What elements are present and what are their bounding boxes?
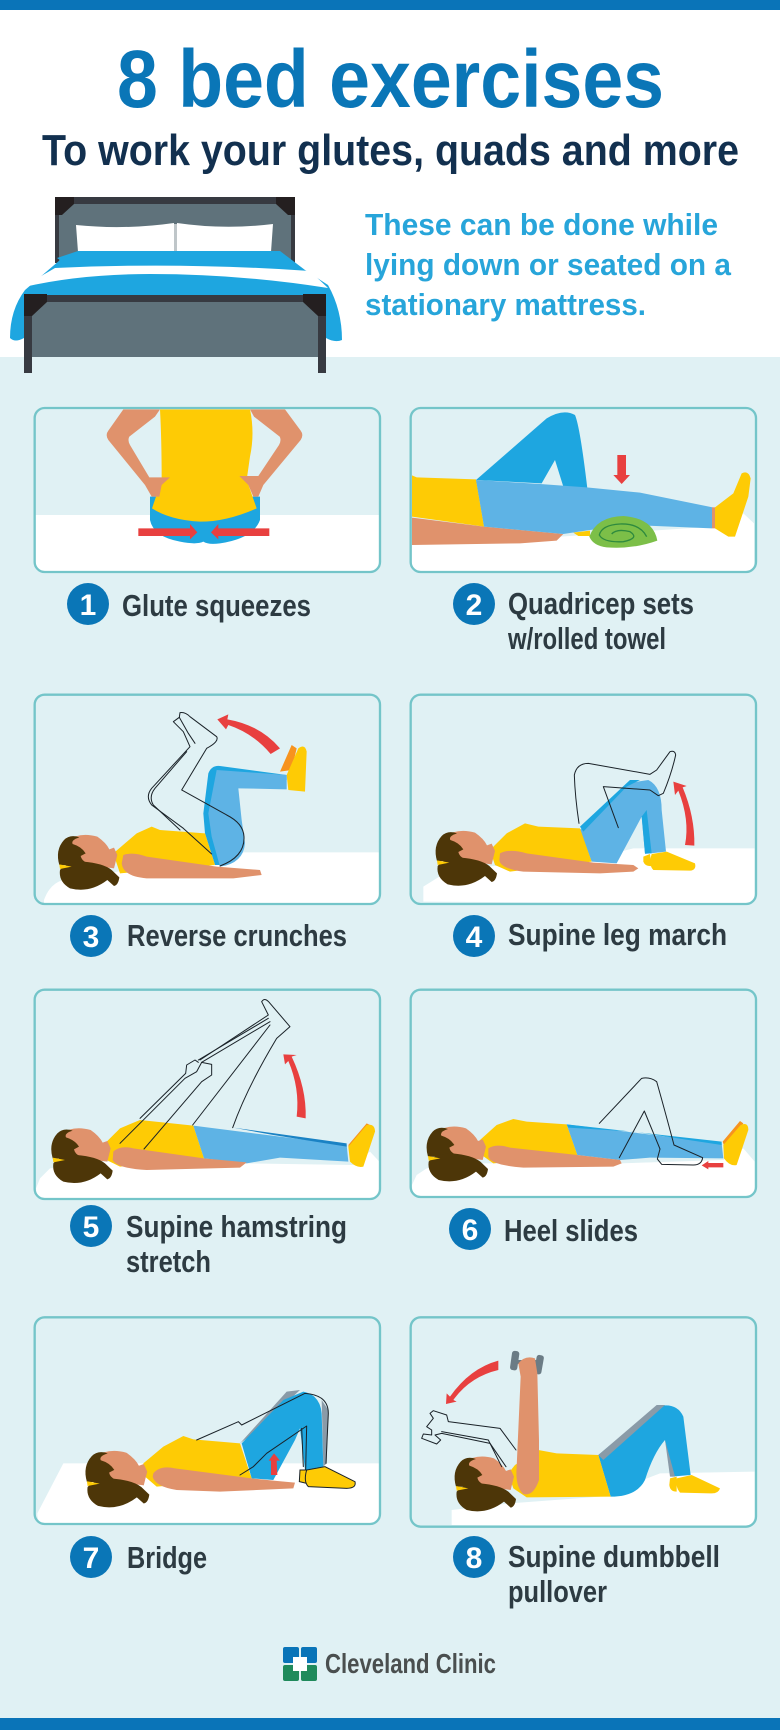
arm <box>153 1467 295 1492</box>
raised arm <box>516 1357 539 1494</box>
title: 8 bed exercises <box>117 34 664 125</box>
label 2: Quadricep sets <box>508 586 694 621</box>
feet <box>280 745 297 772</box>
card frame <box>411 1317 756 1527</box>
logo: Cleveland Clinic <box>283 1647 496 1681</box>
label 7 <box>70 1536 207 1578</box>
arrow <box>269 1453 280 1475</box>
label 8: 8 <box>466 1542 482 1575</box>
panel 3: reverse crunches <box>35 695 380 904</box>
intro text: stationary mattress. <box>365 287 646 322</box>
torso <box>152 409 257 522</box>
outline <box>574 751 676 828</box>
torso <box>508 1450 611 1497</box>
arm <box>113 1147 247 1170</box>
arm <box>412 518 563 545</box>
label 6: Heel slides <box>504 1213 638 1248</box>
arms <box>107 409 170 497</box>
card frame <box>411 408 756 572</box>
arrow <box>702 1161 723 1169</box>
shorts <box>412 475 484 527</box>
arm <box>499 851 638 873</box>
panel 1: glute squeezes <box>35 408 380 572</box>
leg <box>567 1124 723 1160</box>
label 6: 6 <box>462 1214 478 1247</box>
label 2 <box>453 583 694 656</box>
logo: Cleveland Clinic: Cleveland Clinic <box>325 1648 496 1679</box>
leg <box>203 766 287 865</box>
label 7: 7 <box>83 1542 99 1575</box>
outline <box>148 712 244 866</box>
label 8: pullover <box>508 1574 607 1609</box>
label 1 <box>67 583 311 625</box>
arm <box>488 1146 622 1168</box>
intro text <box>365 207 732 322</box>
card frame <box>35 1317 380 1524</box>
raised leg <box>476 412 587 488</box>
label 4: 4 <box>466 921 483 954</box>
arrow <box>673 782 694 846</box>
label 3: Reverse crunches <box>127 918 347 953</box>
icon: bed <box>10 197 342 373</box>
leg <box>580 780 666 863</box>
label 6 <box>449 1208 638 1250</box>
outline <box>599 1078 703 1165</box>
label 1: 1 <box>80 589 96 622</box>
head <box>51 1128 113 1183</box>
label 5 <box>70 1205 347 1279</box>
arrow <box>283 1054 306 1118</box>
torso <box>143 1436 252 1487</box>
arrows <box>138 524 197 539</box>
torso <box>480 1119 577 1163</box>
glutes <box>150 497 260 544</box>
leg <box>193 1126 348 1163</box>
label 2: 2 <box>466 589 482 622</box>
bottom bar <box>0 1718 780 1730</box>
head <box>58 835 119 890</box>
leg <box>598 1405 691 1497</box>
outline <box>120 1000 290 1149</box>
label 5: stretch <box>126 1244 211 1279</box>
arrow <box>446 1361 498 1404</box>
label 3 <box>70 915 347 957</box>
label 8: Supine dumbbell <box>508 1539 720 1574</box>
top bar <box>0 0 780 10</box>
panel 6: heel slides <box>411 990 756 1197</box>
panel 5: supine hamstring stretch <box>35 990 380 1199</box>
head <box>436 831 497 886</box>
intro text: lying down or seated on a <box>365 247 732 282</box>
intro text: These can be done while <box>365 207 718 242</box>
label 7: Bridge <box>127 1540 207 1575</box>
foot <box>669 1477 677 1492</box>
card frame <box>35 695 380 904</box>
foot <box>348 1123 370 1152</box>
head <box>85 1451 149 1507</box>
rolled towel <box>589 516 657 548</box>
label 5: 5 <box>83 1211 99 1244</box>
panel 4: supine leg march <box>411 695 756 904</box>
outline <box>422 1411 516 1467</box>
label 3: 3 <box>83 921 99 954</box>
torso <box>113 827 215 873</box>
label 1: Glute squeezes <box>122 588 311 623</box>
panel 7: bridge <box>35 1317 380 1524</box>
card frame <box>411 990 756 1197</box>
label 5: Supine hamstring <box>126 1209 347 1244</box>
panel 8: supine dumbbell pullover <box>411 1317 756 1527</box>
head <box>427 1127 488 1181</box>
straight leg <box>476 480 713 534</box>
arrow <box>613 455 630 484</box>
label 4: Supine leg march <box>508 917 727 952</box>
feet <box>643 854 652 866</box>
foot <box>723 1121 743 1148</box>
dumbbell <box>510 1351 544 1375</box>
arm <box>122 854 262 878</box>
outline <box>197 1393 328 1475</box>
card frame <box>35 408 380 572</box>
panel 2: quadricep sets <box>411 408 756 572</box>
label 4 <box>453 915 727 957</box>
leg <box>240 1390 328 1480</box>
card frame <box>35 990 380 1199</box>
label 8 <box>453 1536 720 1609</box>
foot <box>715 472 751 537</box>
card frame <box>411 695 756 904</box>
head <box>455 1457 516 1511</box>
feet <box>299 1470 308 1483</box>
arrow <box>217 714 280 754</box>
torso <box>490 823 592 872</box>
label 2: w/rolled towel <box>507 621 666 656</box>
torso <box>103 1120 204 1167</box>
